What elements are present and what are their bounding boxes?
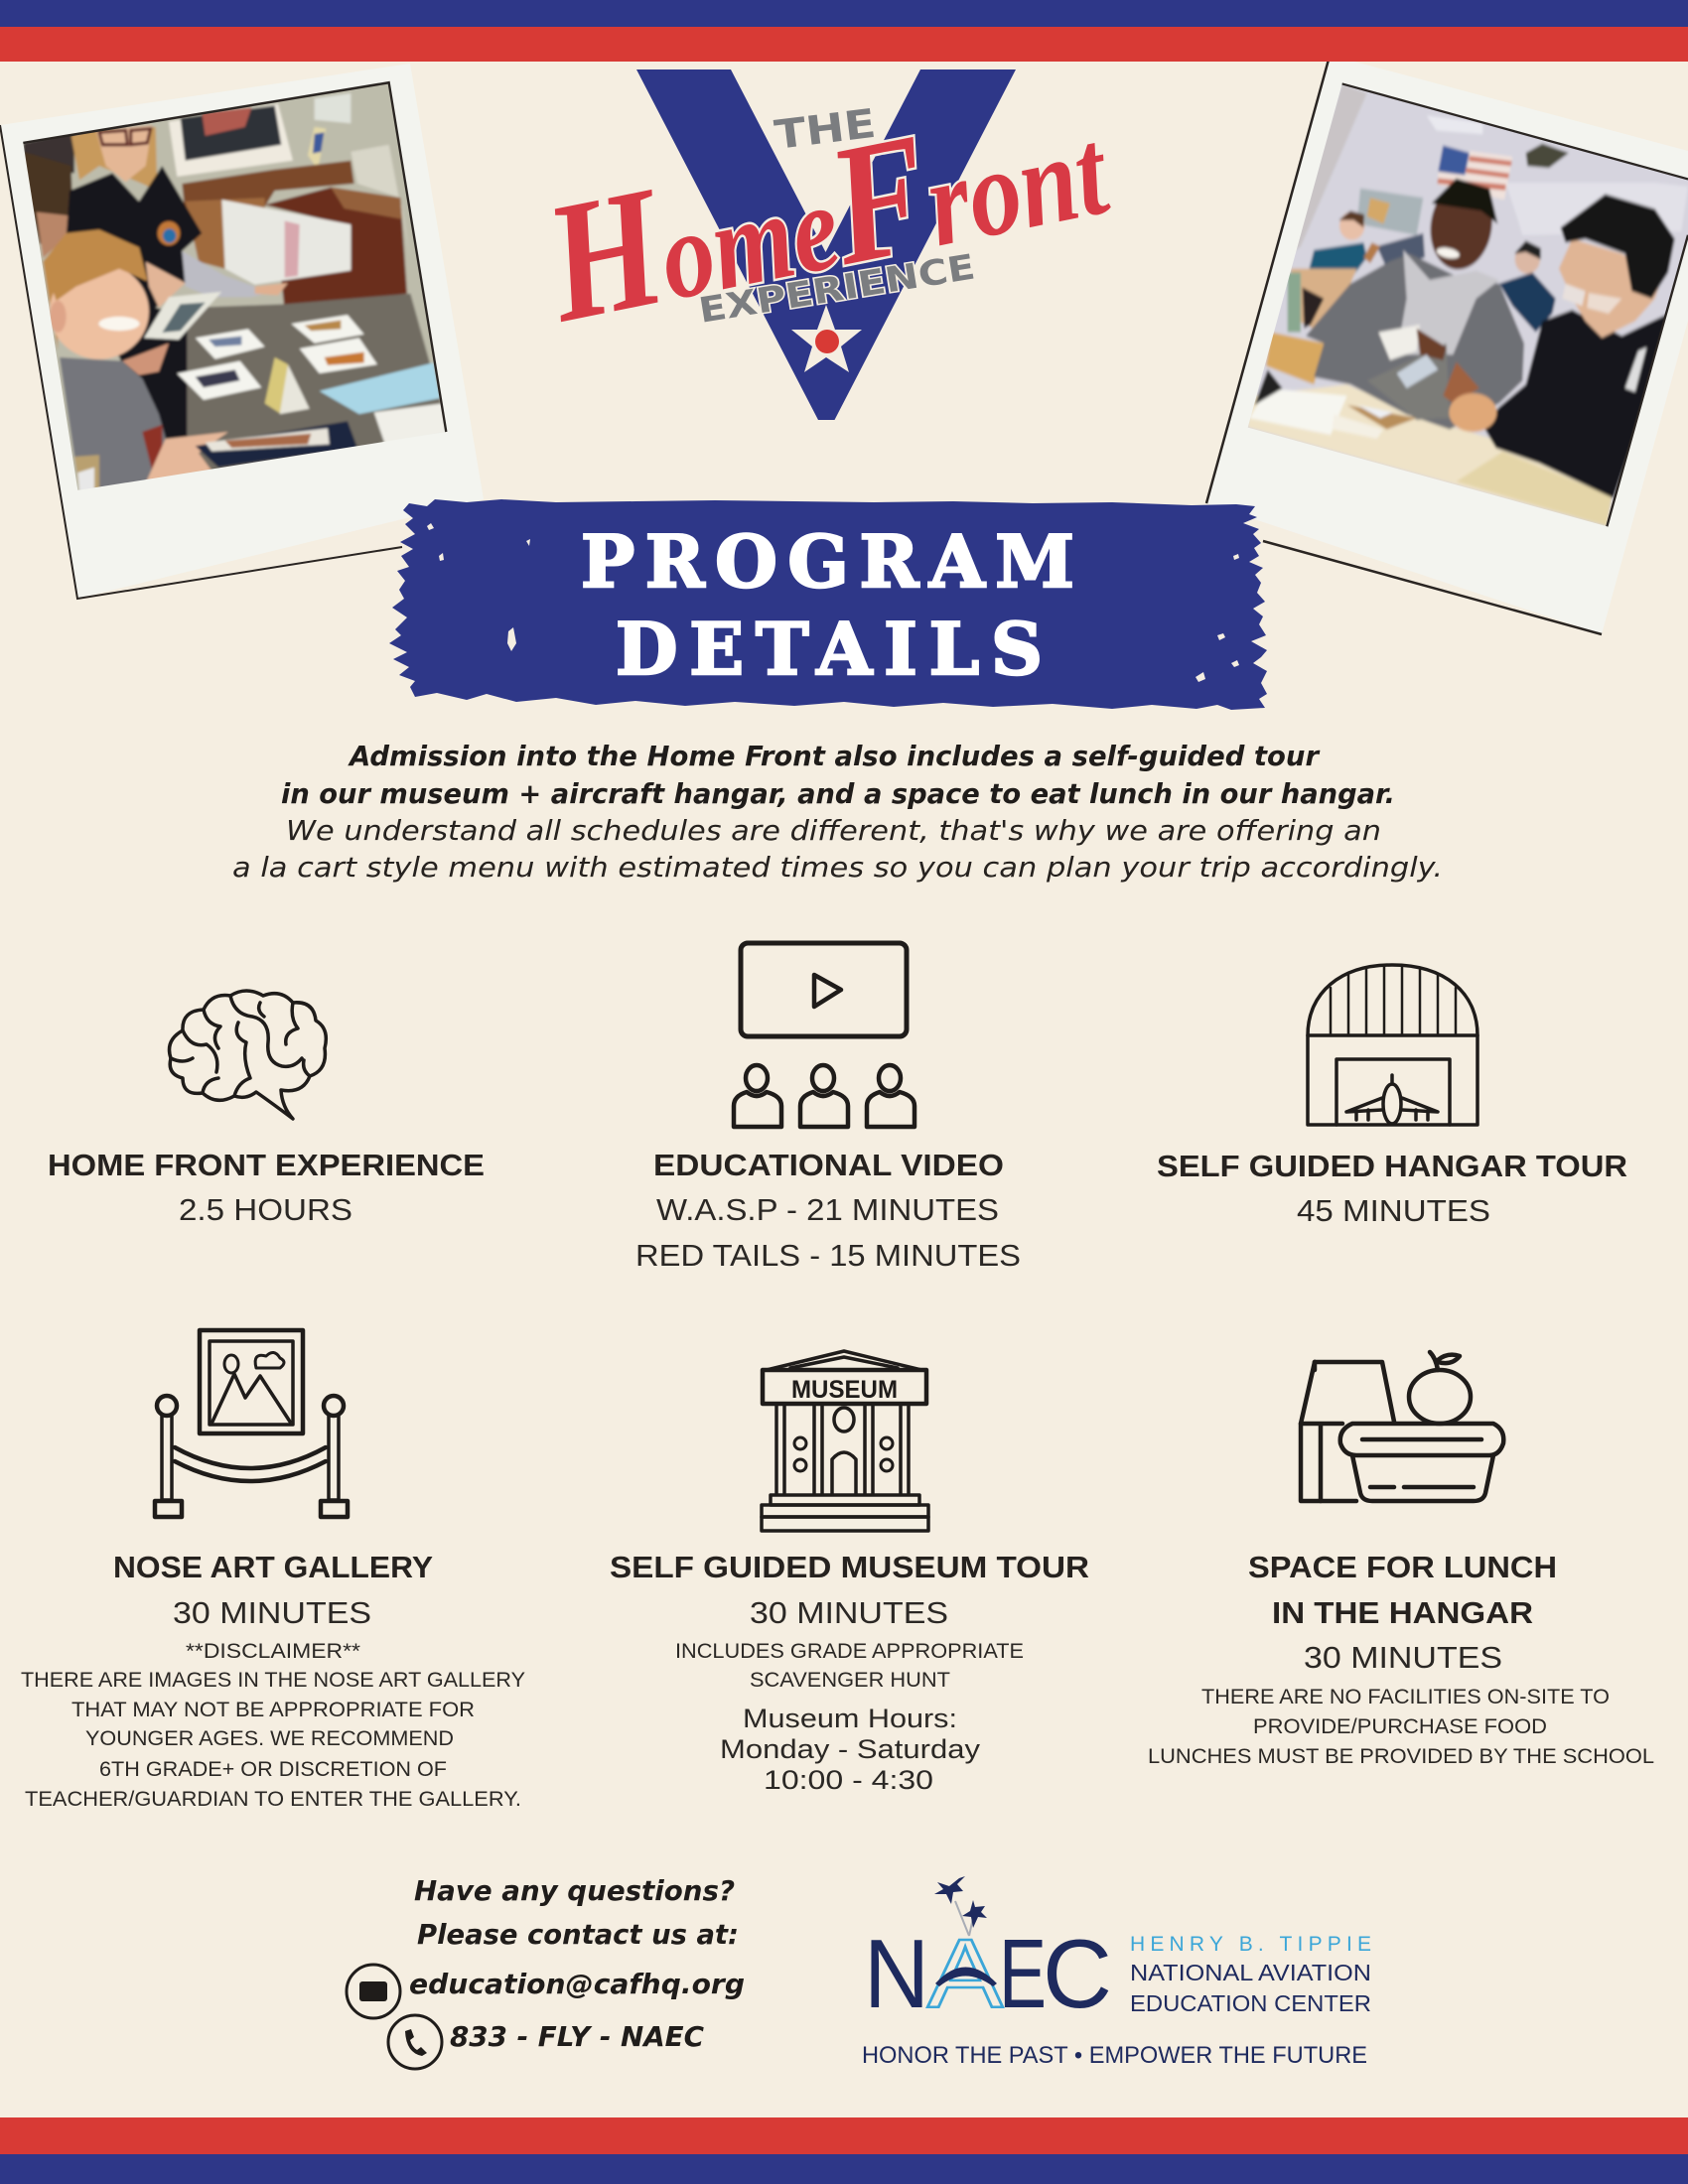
note: LUNCHES MUST BE PROVIDED BY THE SCHOOL	[1148, 1745, 1654, 1768]
item: Space for Lunch	[1148, 1352, 1654, 1768]
disclaimer: TEACHER/GUARDIAN TO ENTER THE GALLERY.	[25, 1788, 521, 1811]
heading: EDUCATIONAL VIDEO	[653, 1148, 1004, 1182]
note: THERE ARE NO FACILITIES ON-SITE TO	[1201, 1686, 1610, 1708]
intro text: in our museum + aircraft hangar, and a space to eat lunch in our hangar.	[281, 777, 1395, 810]
heading: HOME FRONT EXPERIENCE	[48, 1148, 485, 1182]
disclaimer: THERE ARE IMAGES IN THE NOSE ART GALLERY	[21, 1669, 525, 1692]
heading: SELF GUIDED HANGAR TOUR	[1157, 1149, 1627, 1183]
banner: Program Details	[389, 499, 1267, 710]
logo: name lines: NATIONAL AVIATION	[1130, 1960, 1371, 1985]
email address: education@cafhq.org	[409, 1968, 745, 2000]
note: INCLUDES GRADE APPROPRIATE	[675, 1640, 1024, 1663]
contact prompt: Have any questions?	[414, 1874, 735, 1907]
icon: email	[347, 1965, 400, 2018]
duration: 2.5 HOURS	[179, 1192, 352, 1227]
logo: name lines: HENRY B. TIPPIE	[1130, 1933, 1371, 1956]
item: Educational Video	[635, 943, 1021, 1273]
intro text	[232, 740, 1443, 884]
heading: IN THE HANGAR	[1272, 1595, 1533, 1630]
contact prompt: Please contact us at:	[417, 1918, 739, 1951]
disclaimer	[21, 1640, 525, 1811]
bottom stripes	[0, 2117, 1688, 2184]
logo: EXPERIENCE: EXPERIENCE	[696, 247, 978, 332]
note: SCAVENGER HUNT	[750, 1669, 950, 1692]
durations	[635, 1192, 1021, 1273]
logo: planes and contrails	[934, 1876, 987, 1936]
icon: hangar	[1308, 965, 1477, 1125]
heading	[1248, 1550, 1557, 1630]
intro text: We understand all schedules are different, that's why we are offering an	[286, 814, 1381, 847]
logo: NAEC letters	[864, 1919, 1112, 2028]
contact block	[347, 1874, 745, 2069]
brush stroke background	[389, 499, 1267, 710]
photo: right polaroid	[1206, 55, 1688, 634]
icon: video audience	[734, 943, 914, 1127]
logo: NAEC letters: A	[927, 1919, 1004, 2028]
disclaimer: 6TH GRADE+ OR DISCRETION OF	[99, 1758, 447, 1781]
phone number: 833 - FLY - NAEC	[450, 2020, 704, 2053]
logo: Home Front Experience	[530, 63, 1122, 420]
intro text: a la cart style menu with estimated times so you can plan your trip accordingly.	[232, 851, 1443, 884]
heading: SPACE FOR LUNCH	[1248, 1550, 1557, 1584]
logo: THE: THE	[773, 101, 878, 159]
heading: DETAILS: DETAILS	[616, 607, 1043, 691]
note	[675, 1640, 1024, 1692]
contact prompt	[414, 1874, 739, 1951]
duration: 30 MINUTES	[1304, 1640, 1502, 1675]
durations: RED TAILS - 15 MINUTES	[635, 1238, 1021, 1273]
heading: SELF GUIDED MUSEUM TOUR	[610, 1550, 1089, 1584]
museum hours: Monday - Saturday	[720, 1734, 981, 1764]
item: Self Guided Hangar Tour	[1157, 965, 1627, 1228]
top stripes	[0, 0, 1688, 62]
logo: tagline: HONOR THE PAST • EMPOWER THE FUTURE	[862, 2042, 1367, 2069]
logo: HomeFront script: HomeFront	[530, 63, 1122, 359]
item: Home Front Experience	[48, 991, 485, 1227]
note: PROVIDE/PURCHASE FOOD	[1253, 1715, 1547, 1738]
icon: museum building	[762, 1351, 928, 1531]
item: Nose Art Gallery	[21, 1330, 525, 1811]
logo: NAEC	[862, 1876, 1371, 2069]
logo: name lines	[1130, 1933, 1371, 2016]
icon: lunch bag apple and box	[1301, 1352, 1503, 1501]
logo: NAEC letters: E	[999, 1919, 1047, 2028]
logo: star	[791, 305, 862, 372]
icon: museum building: MUSEUM	[791, 1376, 898, 1404]
intro text: Admission into the Home Front also includes a self-guided tour	[348, 740, 1321, 772]
museum hours: Museum Hours:	[743, 1704, 957, 1733]
disclaimer: **DISCLAIMER**	[186, 1640, 360, 1663]
heading: NOSE ART GALLERY	[113, 1550, 433, 1584]
duration: 45 MINUTES	[1297, 1193, 1490, 1228]
icon: brain	[169, 991, 326, 1119]
logo: blue V	[636, 69, 1016, 420]
item: Self Guided Museum Tour	[610, 1351, 1089, 1795]
durations: W.A.S.P - 21 MINUTES	[656, 1192, 999, 1227]
disclaimer: YOUNGER AGES. WE RECOMMEND	[85, 1727, 454, 1750]
icon: phone	[388, 2015, 442, 2069]
photo: left polaroid	[0, 64, 484, 599]
logo: NAEC letters: N	[864, 1919, 929, 2028]
note	[1148, 1686, 1654, 1768]
duration: 30 MINUTES	[750, 1595, 948, 1630]
heading: PROGRAM: PROGRAM	[581, 519, 1074, 604]
icon: gallery painting and stanchions	[155, 1330, 348, 1517]
logo: NAEC letters: C	[1043, 1919, 1112, 2028]
museum hours: 10:00 - 4:30	[764, 1765, 933, 1795]
duration: 30 MINUTES	[173, 1595, 371, 1630]
museum hours	[720, 1704, 981, 1795]
logo: name lines: EDUCATION CENTER	[1130, 1990, 1371, 2016]
disclaimer: THAT MAY NOT BE APPROPRIATE FOR	[71, 1699, 475, 1721]
